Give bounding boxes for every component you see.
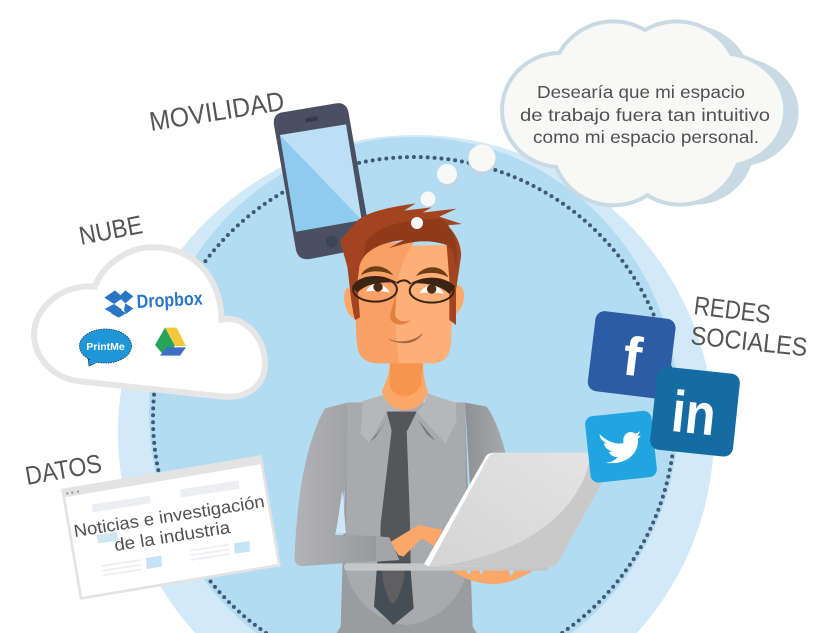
icon: Dropbox	[104, 290, 133, 318]
label: MOVILIDAD: MOVILIDAD	[147, 86, 286, 137]
label: NUBE: NUBE	[76, 209, 145, 251]
quote text: Desearía que mi espacio	[537, 82, 745, 102]
head	[340, 203, 464, 363]
icon: Twitter	[584, 410, 658, 483]
logo: PrintMe: PrintMe	[86, 341, 125, 353]
icon: smartphone	[274, 103, 371, 259]
label: REDES: REDES	[692, 290, 772, 329]
icon: LinkedIn: in	[669, 379, 719, 448]
panel: cloud with storage logos	[34, 247, 265, 397]
panel: thought cloud with quote	[504, 23, 799, 205]
background circle: outer light ring	[118, 135, 714, 633]
text: news and research: de la industria	[113, 517, 232, 555]
text: news and research: Noticias e investigación	[72, 491, 266, 541]
label: DATOS: DATOS	[23, 448, 104, 491]
icon: Facebook: f	[620, 325, 646, 388]
illustration: man with laptop	[295, 203, 602, 633]
panel: data browser window	[63, 457, 279, 598]
collar	[361, 395, 405, 443]
thought dots	[411, 144, 496, 229]
logo: Google Drive	[155, 328, 186, 356]
logo: PrintMe	[80, 329, 132, 366]
background circle: inner blue	[149, 137, 679, 633]
label: SOCIALES: SOCIALES	[689, 320, 809, 362]
neck	[382, 362, 428, 410]
icons: social networks	[584, 310, 741, 483]
glasses	[353, 277, 454, 303]
tie	[374, 412, 417, 625]
laptop and hands	[344, 453, 602, 584]
eyebrows	[361, 266, 393, 275]
quote text: como mi espacio personal.	[533, 127, 759, 147]
dotted orbit	[153, 157, 675, 633]
quote text	[520, 82, 770, 147]
body and shirt	[295, 362, 506, 633]
hair	[340, 203, 462, 325]
text: Dropbox: Dropbox	[136, 289, 204, 313]
icon: LinkedIn	[649, 366, 741, 457]
quote text: de trabajo fuera tan intuitivo	[520, 105, 770, 125]
eyes	[366, 284, 390, 293]
icon: Facebook	[587, 310, 677, 400]
